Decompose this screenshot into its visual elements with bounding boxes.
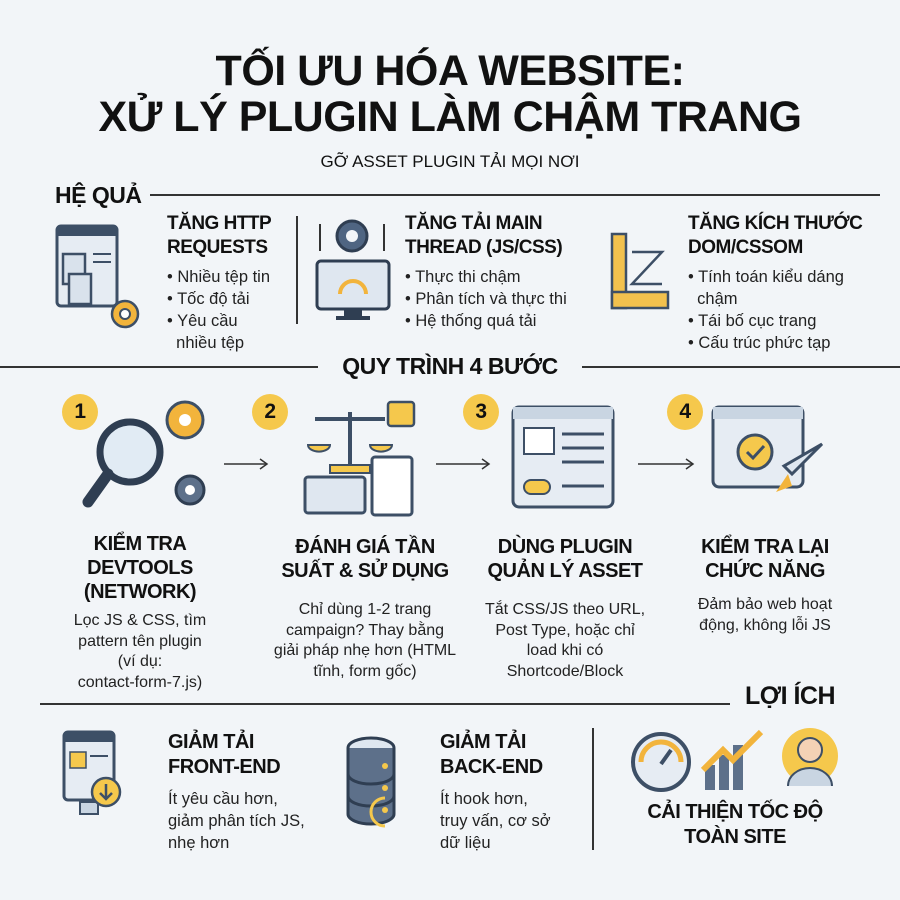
text: GIẢM TẢI <box>168 731 254 753</box>
text: • Cấu trúc phức tạp <box>688 334 830 352</box>
description: pattern tên plugin <box>78 632 202 650</box>
text: dữ liệu <box>440 834 490 852</box>
text: nhiều tệp <box>176 334 244 352</box>
arrow <box>638 458 694 470</box>
badge 1: 1 <box>74 400 86 423</box>
text: GIẢM TẢI <box>440 731 526 753</box>
panel: main thread <box>316 212 567 330</box>
text: • Nhiều tệp tin <box>167 268 270 286</box>
text <box>168 730 305 852</box>
text: • Tính toán kiểu dáng <box>688 268 844 286</box>
text: TĂNG TẢI MAIN <box>405 213 542 234</box>
badge 4 <box>667 394 703 430</box>
title: DÙNG PLUGIN <box>498 536 632 558</box>
step 3 <box>463 394 645 680</box>
icon: check window rocket <box>712 406 823 492</box>
step 1 <box>62 394 206 690</box>
badge 3 <box>463 394 499 430</box>
title: KIỂM TRA <box>94 533 186 555</box>
text: giảm phân tích JS, <box>168 812 305 830</box>
text: • Tái bố cục trang <box>688 312 816 330</box>
description: Shortcode/Block <box>507 662 623 680</box>
text: Ít hook hơn, <box>440 790 528 808</box>
text: • Tốc độ tải <box>167 290 250 308</box>
badge 3: 3 <box>475 400 487 423</box>
description: Post Type, hoặc chỉ <box>495 622 635 638</box>
description <box>74 612 206 690</box>
title: SUẤT & SỬ DỤNG <box>281 560 449 582</box>
text: TĂNG HTTP <box>167 213 271 234</box>
icon: magnifier gears <box>82 400 206 508</box>
text: REQUESTS <box>167 237 268 258</box>
badge 1 <box>62 394 98 430</box>
icon: database <box>346 736 396 828</box>
text <box>440 730 551 852</box>
text <box>688 212 862 352</box>
panel: http requests <box>56 212 271 352</box>
badge 2 <box>252 394 288 430</box>
description: load khi có <box>527 642 603 659</box>
panel: toàn site <box>631 728 838 848</box>
title: XỬ LÝ PLUGIN LÀM CHẬM TRANG <box>98 93 801 141</box>
title: (NETWORK) <box>84 581 196 603</box>
text: truy vấn, cơ sở <box>440 812 551 830</box>
description: tĩnh, form gốc) <box>313 662 417 680</box>
text: • Thực thi chậm <box>405 268 521 286</box>
title: KIỂM TRA LẠI <box>701 536 829 558</box>
text: nhẹ hơn <box>168 834 229 852</box>
icon: gauge chart person <box>631 728 838 792</box>
text: chậm <box>697 290 738 308</box>
description <box>698 596 832 634</box>
badge 4: 4 <box>679 400 691 423</box>
title <box>488 534 643 582</box>
text <box>405 212 567 330</box>
icon: scales document <box>304 400 416 516</box>
text: • Phân tích và thực thi <box>405 290 567 308</box>
title <box>98 46 801 141</box>
text: CẢI THIỆN TỐC ĐỘ <box>647 801 823 823</box>
text: • Hệ thống quá tải <box>405 312 536 330</box>
icon: monitor gear <box>316 220 390 320</box>
step 2 <box>252 394 456 680</box>
icon: monitor download <box>62 730 122 815</box>
description: giải pháp nhẹ hơn (HTML <box>274 642 456 659</box>
heading: quy trình: QUY TRÌNH 4 BƯỚC <box>342 353 558 379</box>
description: Tắt CSS/JS theo URL, <box>485 601 645 618</box>
text: THREAD (JS/CSS) <box>405 237 562 258</box>
description: Đảm bảo web hoạt <box>698 596 832 613</box>
description <box>274 601 456 680</box>
text: BACK-END <box>440 756 543 778</box>
title: DEVTOOLS <box>87 557 193 579</box>
icon: settings window <box>512 406 614 508</box>
heading: hệ quả: HỆ QUẢ <box>55 182 141 208</box>
title: TỐI ƯU HÓA WEBSITE: <box>216 47 684 95</box>
text: TĂNG KÍCH THƯỚC <box>688 213 862 234</box>
description: Chỉ dùng 1-2 trang <box>299 601 431 618</box>
title <box>281 534 449 582</box>
title: ĐÁNH GIÁ TẦN <box>295 536 435 558</box>
text: • Yêu cầu <box>167 312 238 330</box>
text: FRONT-END <box>168 756 280 778</box>
description <box>485 600 645 680</box>
step 4 <box>667 394 832 634</box>
title: CHỨC NĂNG <box>705 560 825 582</box>
text: Ít yêu cầu hơn, <box>168 790 278 808</box>
heading: lợi ích: LỢI ÍCH <box>745 682 835 710</box>
description: campaign? Thay bằng <box>286 622 444 638</box>
panel: back-end <box>346 730 551 852</box>
arrow <box>436 458 490 470</box>
text: DOM/CSSOM <box>688 237 803 258</box>
icon: ruler <box>610 232 670 310</box>
description: contact-form-7.js) <box>78 674 202 690</box>
title <box>701 534 829 582</box>
arrow <box>224 458 268 470</box>
text <box>647 800 823 848</box>
panel: dom size <box>610 212 862 352</box>
description: Lọc JS & CSS, tìm <box>74 612 206 629</box>
badge 2: 2 <box>264 400 276 423</box>
description: (ví dụ: <box>118 653 162 670</box>
icon: files window <box>56 224 140 328</box>
text <box>167 212 271 352</box>
description: động, không lỗi JS <box>699 616 831 634</box>
subtitle: GỠ ASSET PLUGIN TẢI MỌI NƠI <box>320 152 580 171</box>
title: QUẢN LÝ ASSET <box>488 560 642 582</box>
title <box>84 532 196 603</box>
panel: front-end <box>62 730 305 852</box>
text: TOÀN SITE <box>684 826 786 848</box>
